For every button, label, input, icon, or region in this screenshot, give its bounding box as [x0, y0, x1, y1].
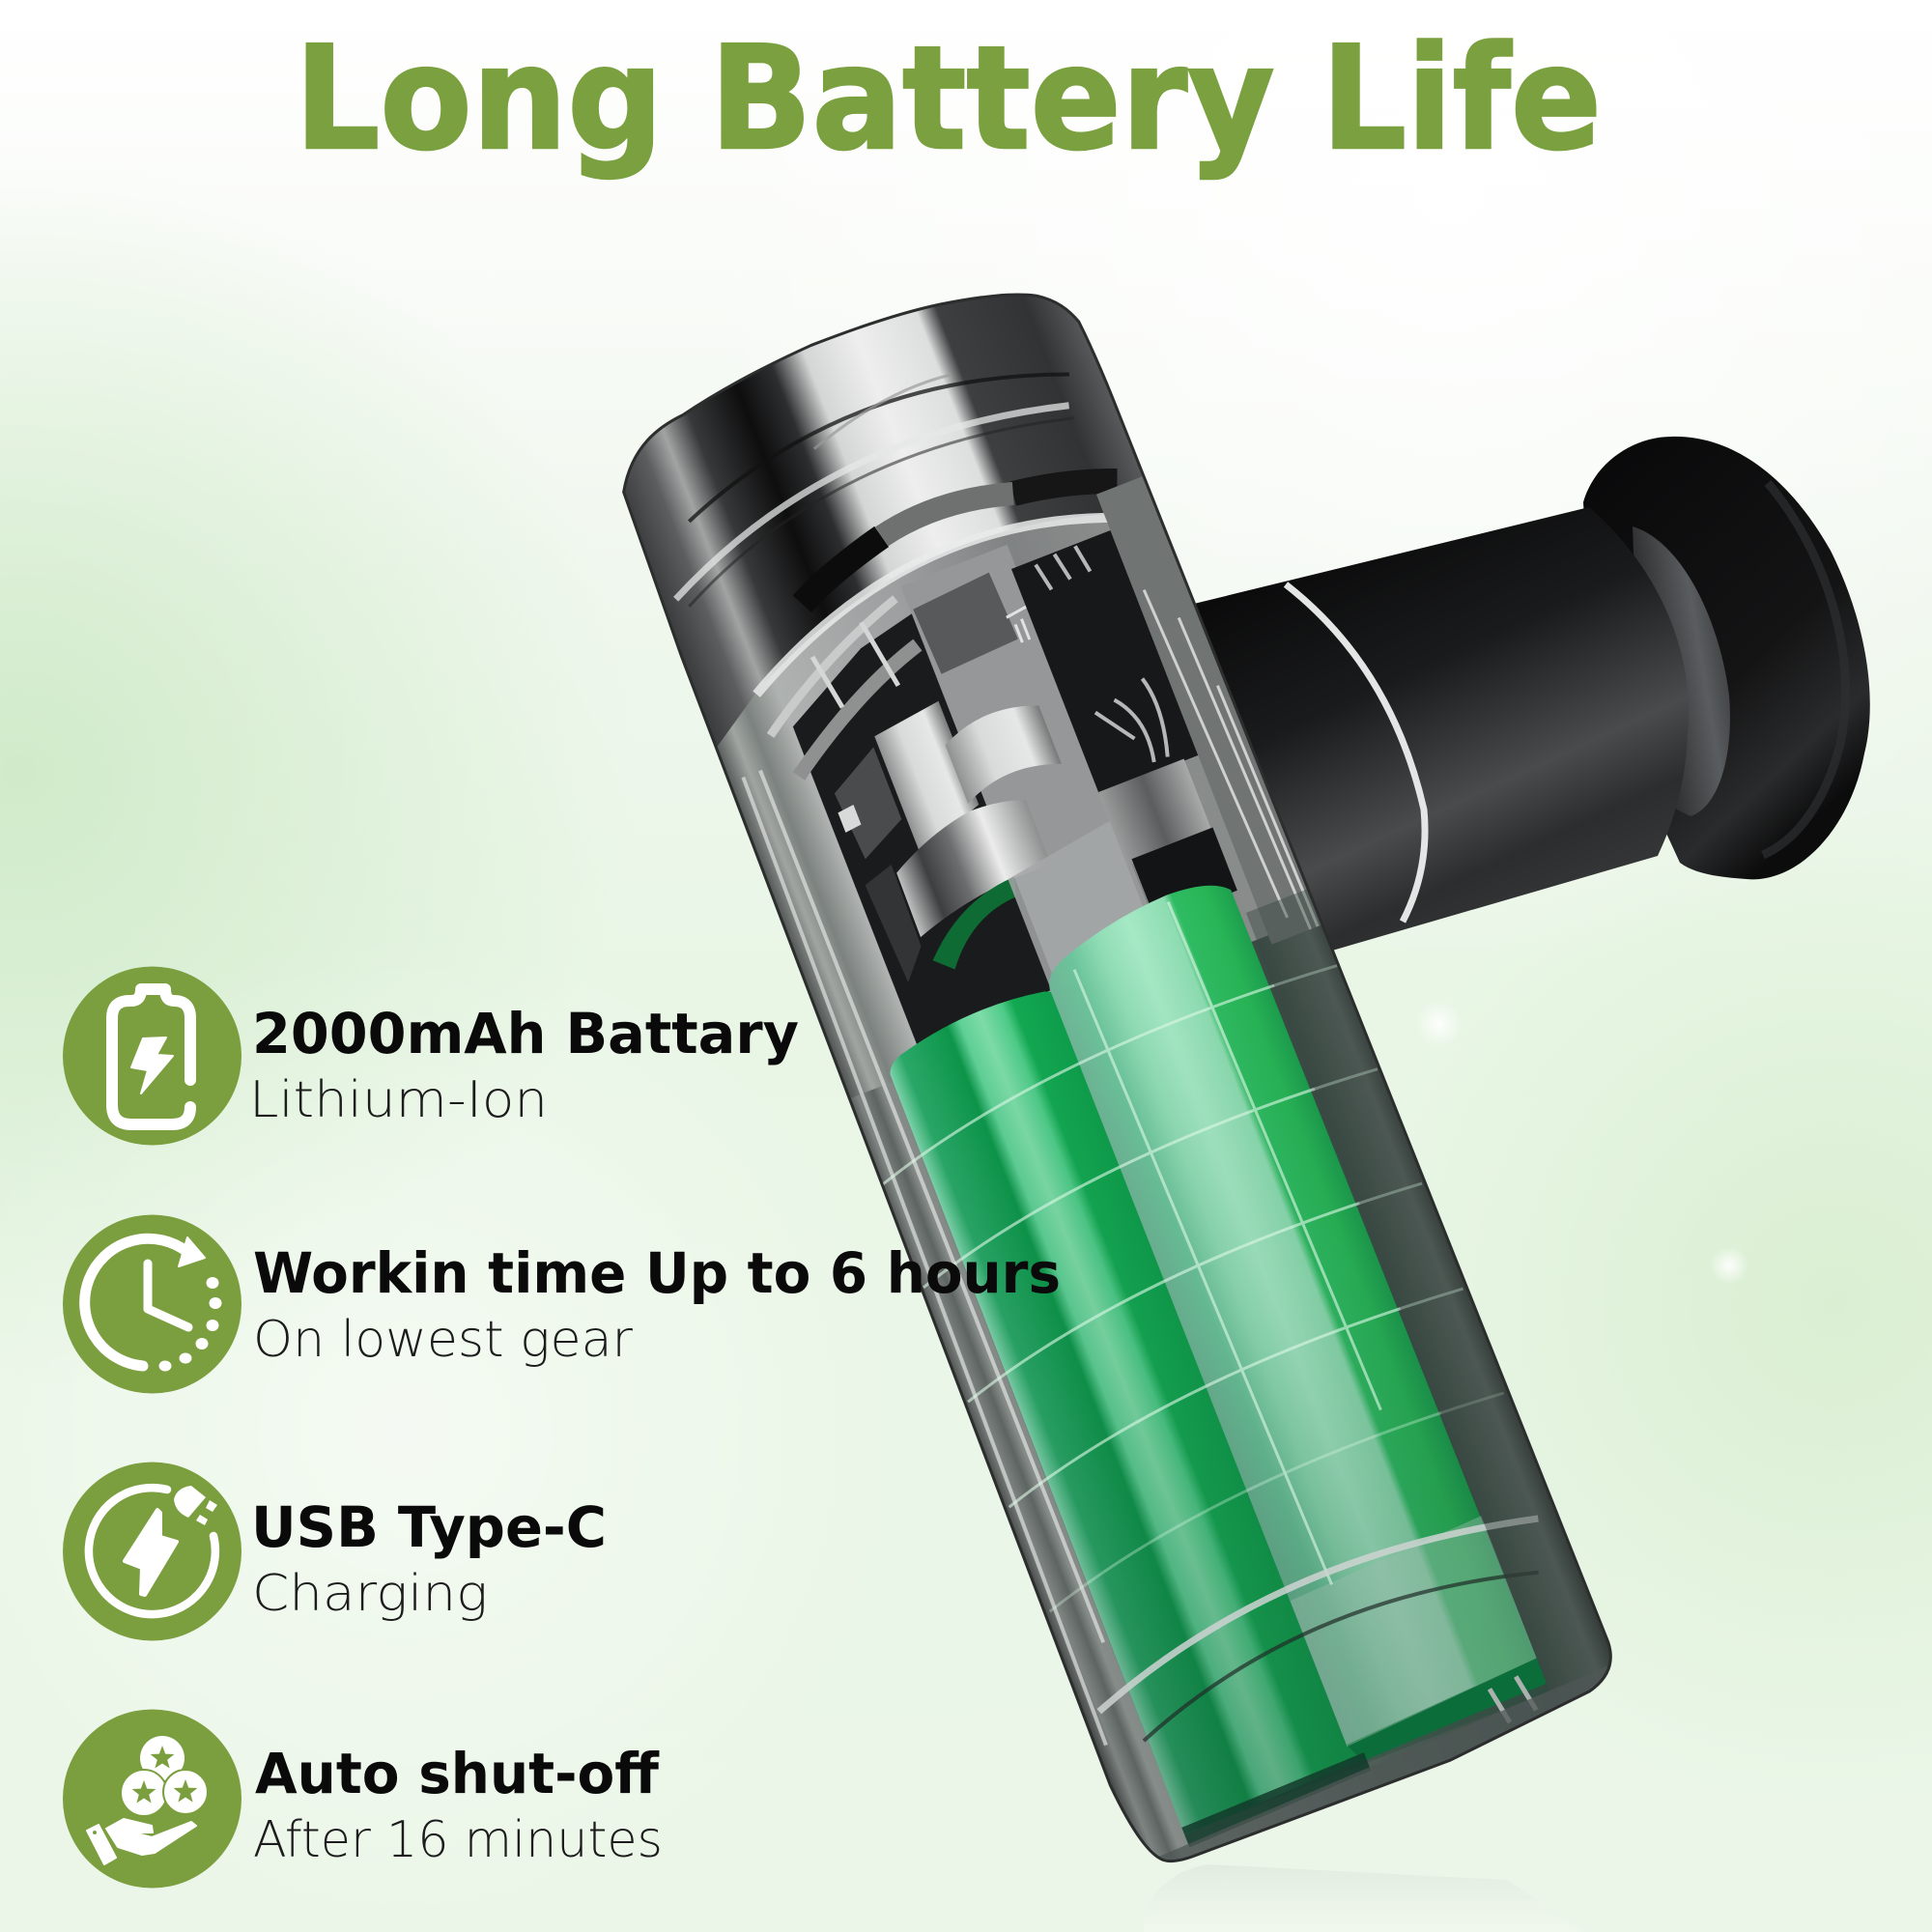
massage gun product illustration	[574, 225, 1870, 1885]
left glass lines	[742, 770, 1108, 1747]
heading: 2000mAh Battary: 2000mAh Battary	[252, 1001, 799, 1066]
handle outline	[583, 246, 1628, 1879]
edge shading	[1246, 889, 1604, 1681]
cap rings	[673, 373, 1117, 697]
title: Long Battery Life	[295, 15, 1602, 182]
icon: charging ring with plug	[63, 1463, 242, 1640]
feature: auto shut-off	[63, 1710, 663, 1888]
feature: working time	[63, 1215, 1061, 1393]
transparent handle containing motor and batteries	[622, 294, 1612, 1862]
subtext: Lithium-Ion: Lithium-Ion	[249, 1071, 548, 1129]
lithium battery cells	[863, 867, 1555, 1847]
feature list	[63, 966, 1061, 1888]
subtext: Charging: Charging	[252, 1565, 488, 1623]
heading: Auto shut-off: Auto shut-off	[255, 1741, 660, 1806]
feature: battery	[63, 966, 799, 1146]
subtext: On lowest gear: On lowest gear	[253, 1311, 634, 1369]
feature: USB charging	[63, 1463, 607, 1640]
massage head: black cylinder and round cap	[1194, 437, 1870, 951]
top cap	[625, 296, 1142, 746]
battery grid lines	[883, 901, 1504, 1613]
icon: battery with bolt	[63, 966, 242, 1146]
icon: hand holding starred coins	[63, 1710, 242, 1888]
heading: Workin time Up to 6 hours: Workin time Up to 6 hours	[253, 1240, 1061, 1306]
icon: clock with circular arrow	[63, 1215, 242, 1393]
heading: USB Type-C: USB Type-C	[251, 1494, 607, 1560]
handle glass body	[583, 246, 1628, 1879]
motor internals	[767, 476, 1321, 1044]
mid section	[717, 514, 1268, 1097]
bottom rings	[1082, 1493, 1604, 1860]
subtext: After 16 minutes: After 16 minutes	[253, 1811, 663, 1869]
